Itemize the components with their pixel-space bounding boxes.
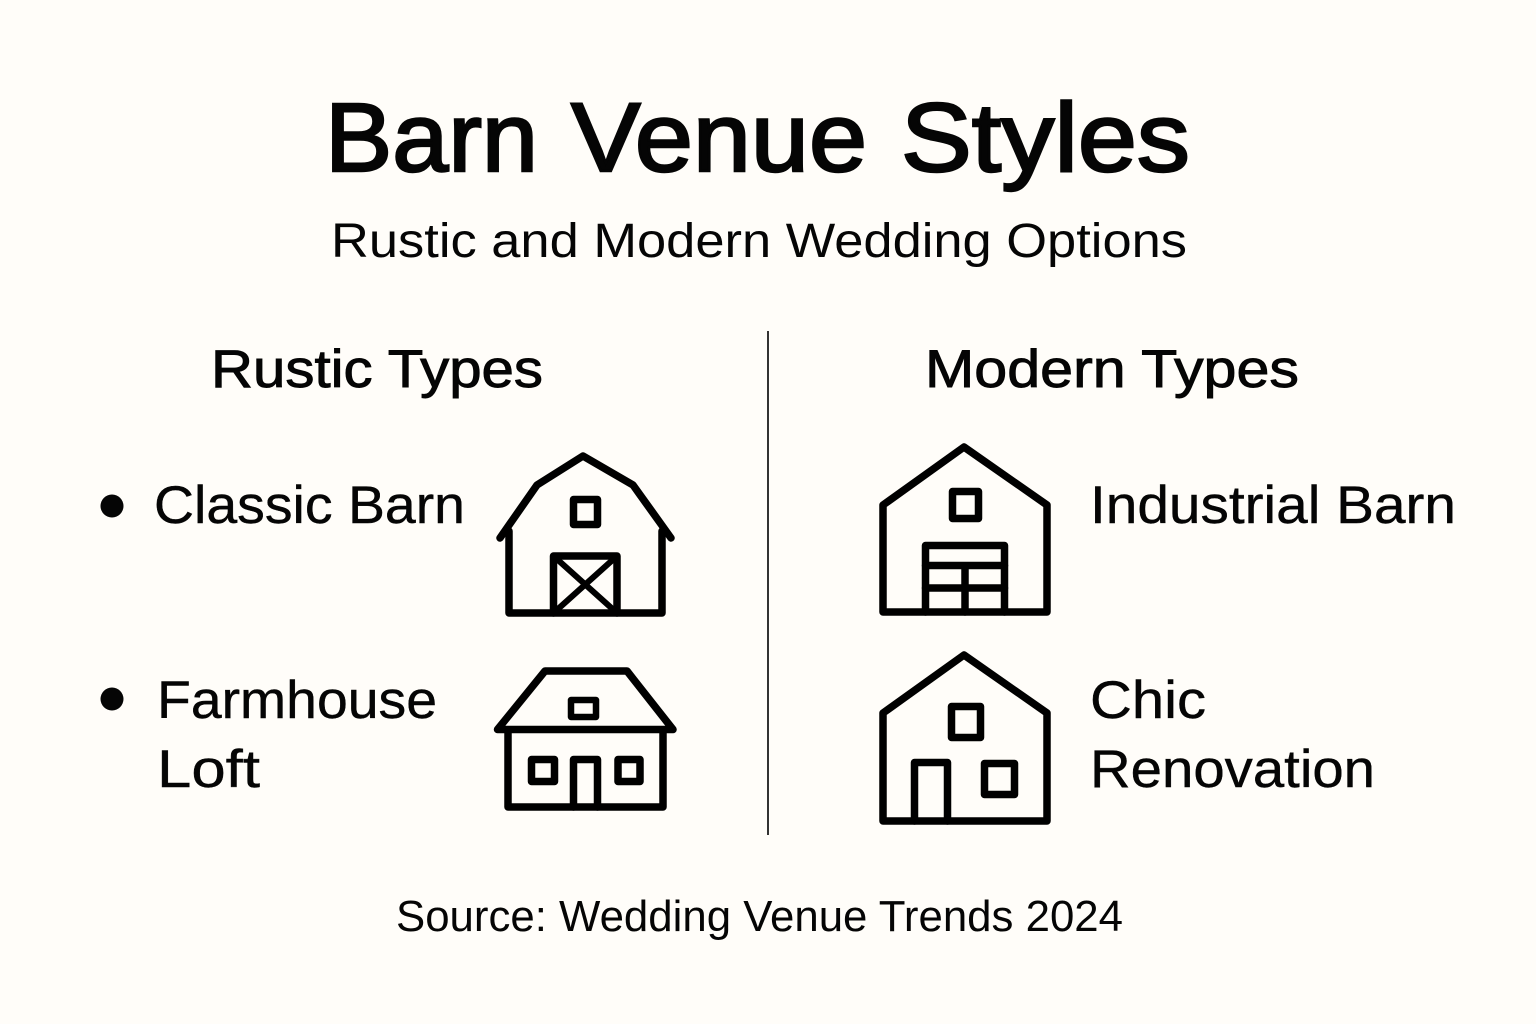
subtitle: Rustic and Modern Wedding Options (331, 215, 1187, 268)
divider (767, 331, 769, 835)
item: industrial barn: Industrial Barn (1090, 476, 1456, 535)
heading: modern types: Modern Types (925, 340, 1299, 399)
source note: Source: Wedding Venue Trends 2024 (396, 892, 1123, 941)
icon: chic renovation (883, 655, 1047, 821)
item: chic renovation: Chic (1090, 671, 1206, 730)
item: classic barn: Classic Barn (154, 476, 465, 535)
icon: farmhouse loft (498, 671, 673, 807)
icon: classic barn (500, 456, 671, 613)
panel: modern types (883, 340, 1456, 821)
icon: industrial barn (883, 447, 1047, 612)
title: Styles (901, 83, 1190, 192)
heading: rustic types: Rustic Types (211, 340, 543, 399)
item: chic renovation (1090, 671, 1375, 799)
title: Barn (325, 83, 538, 192)
title (325, 83, 1190, 192)
item: chic renovation: Renovation (1090, 740, 1375, 799)
item: farmhouse loft: Farmhouse (157, 671, 437, 730)
item: farmhouse loft (100, 671, 437, 799)
item: farmhouse loft: Loft (157, 740, 260, 799)
title: Venue (571, 83, 867, 192)
panel: rustic types (100, 340, 673, 807)
